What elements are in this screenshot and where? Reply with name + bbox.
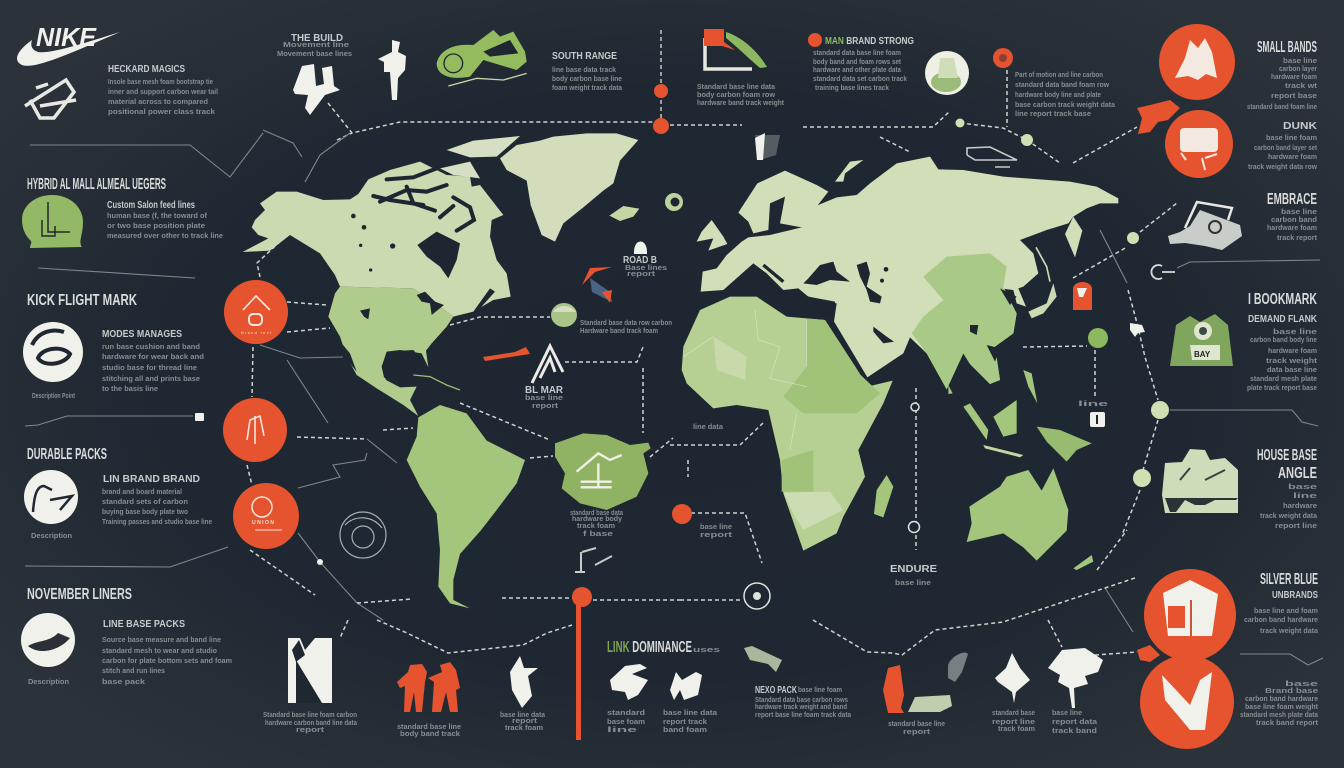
- bottom row: track foam: [998, 726, 1035, 733]
- icon: red stroke: [483, 347, 530, 361]
- icon: white circle with shoe: [21, 613, 75, 667]
- right column: base line: [1281, 209, 1317, 216]
- right column: base line foam: [1266, 135, 1317, 142]
- panel: left 3: stitching all and prints base: [102, 376, 200, 383]
- top center icons and text: line report track base: [1015, 111, 1091, 118]
- right column: carbon band hardware: [1244, 617, 1318, 624]
- right column: data base line: [1267, 367, 1317, 374]
- top center icons and text: training base lines track: [815, 85, 889, 92]
- right column: carbon band layer set: [1254, 145, 1318, 152]
- top heading with red dot: [808, 33, 914, 47]
- red badges left: [223, 280, 299, 549]
- badge: head: UNION: [252, 520, 274, 526]
- center map callouts: base line: [700, 524, 732, 531]
- sketch globe: [340, 512, 386, 558]
- panel: left 1: positional power class track: [108, 109, 215, 116]
- icon: spade: [995, 653, 1030, 703]
- top center icons and text: SOUTH RANGE: [552, 50, 617, 62]
- center map callouts: report: [627, 271, 656, 278]
- bottom row: band foam: [663, 727, 707, 734]
- icon: pale building: [1162, 449, 1238, 513]
- icon: two red figures: [397, 662, 460, 712]
- connector right: [1170, 410, 1318, 426]
- icon: green shoe: [437, 30, 527, 86]
- icon: white machine: [1168, 202, 1242, 250]
- icon: red arrow: [1137, 100, 1180, 134]
- world map: Americas: [243, 133, 651, 608]
- route nodes: [317, 118, 1169, 565]
- center map callouts: standard base data: [570, 510, 623, 517]
- right column: report line: [1275, 523, 1317, 530]
- arctic channels: [373, 168, 474, 231]
- center map callouts: base line: [525, 395, 563, 402]
- right column: Brand base: [1265, 688, 1318, 695]
- right column: hardware foam: [1267, 225, 1317, 232]
- top center icons and text: hardware band track weight: [697, 100, 785, 107]
- right column: base line foam weight: [1245, 704, 1319, 711]
- badge: building: [1144, 569, 1236, 661]
- panel: left 2: or two base position plate: [107, 223, 205, 230]
- right column: DUNK: [1283, 120, 1317, 132]
- badge: hood: [224, 280, 288, 344]
- panel: left 4: Description: [31, 533, 72, 540]
- connector line left 1: [30, 133, 263, 177]
- badge: head: [233, 483, 299, 549]
- top center icons and text: hardware and other plate data: [813, 67, 901, 74]
- panel: left 3: hardware for wear back and: [102, 354, 204, 361]
- bottom row: report: [903, 729, 931, 736]
- indian ocean markers: [908, 403, 920, 532]
- Borneo, Sumatra, Philippines, Java, Japan, New Zealand: [948, 283, 1093, 570]
- USA and Mexico: [328, 287, 453, 416]
- top center icons and text: Part of motion and line carbon: [1015, 72, 1103, 79]
- top center icons and text: Movement line: [283, 42, 349, 49]
- bottom row: base line data: [500, 712, 545, 719]
- icon: white figure: [510, 656, 538, 708]
- right column: carbon band body line: [1250, 337, 1317, 344]
- bottom row: body band track: [400, 731, 460, 738]
- panel: left 2: HYBRID AL MALL ALMEAL UEGERS: [27, 176, 166, 193]
- panel: left 4: DURABLE PACKS: [27, 446, 107, 463]
- bottom row: Standard data base carbon rows: [755, 697, 848, 704]
- vertical route with markers: [653, 30, 669, 135]
- bottom row: standard base line: [397, 724, 461, 731]
- icon: green dot: [1088, 328, 1108, 348]
- bottom row: track foam: [505, 725, 543, 732]
- bottom row: report base line foam track data: [755, 712, 851, 719]
- bottom row: standard base line: [888, 721, 945, 728]
- bottom row: report line: [992, 719, 1035, 726]
- right column: base: [1285, 681, 1318, 688]
- center map callouts: Base lines: [625, 265, 667, 272]
- panel: left 3: KICK FLIGHT MARK: [27, 292, 137, 309]
- panel: left 1: [25, 63, 218, 118]
- Caribbean islands: [413, 375, 460, 390]
- right column: carbon band hardware: [1245, 696, 1318, 703]
- Kamchatka: [1065, 217, 1082, 257]
- right column: track weight data row: [1248, 164, 1318, 171]
- right column: line: [1293, 493, 1317, 500]
- top center icons and text: body band and foam rows set: [813, 59, 902, 66]
- panel: left 5: Source base measure and band line: [102, 637, 221, 644]
- panel: left 5: LINE BASE PACKS: [103, 618, 185, 630]
- Madagascar: [874, 475, 893, 517]
- panel: left 3: [23, 292, 204, 400]
- right column: carbon layer: [1279, 66, 1317, 73]
- panel: left 3: Description Point: [32, 393, 75, 400]
- right column: track weight data: [1260, 628, 1318, 635]
- right column: plate track report base: [1247, 385, 1317, 392]
- top center icons and text: [277, 29, 1169, 565]
- right column: standard mesh plate: [1250, 376, 1317, 383]
- panel: left 1: inner and support carbon wear tail: [108, 89, 218, 96]
- panel: left 4: [24, 446, 212, 540]
- icon: green bag: BAY: [1194, 350, 1211, 359]
- icon: white tag: [1090, 412, 1105, 427]
- right column: track weight: [1266, 358, 1318, 365]
- center map callouts: BL MAR: [525, 384, 563, 396]
- top center icons and text: Standard base line data: [697, 84, 775, 91]
- bottom row: standard base: [992, 710, 1035, 717]
- bottom row: track band: [1052, 728, 1097, 735]
- top center icons and text: body carbon foam row: [697, 92, 776, 99]
- bottom row: report data: [1052, 719, 1097, 726]
- panel: left 4: Training passes and studio base line: [102, 519, 212, 526]
- hook and line: [1151, 260, 1320, 279]
- bottom row: standard: [607, 710, 645, 717]
- bottom row: base foam: [607, 719, 645, 726]
- red dot with dark center: [993, 48, 1013, 68]
- panel: left 2: Custom Salon feed lines: [107, 199, 195, 211]
- connector line left 3: [25, 413, 204, 426]
- world map: Eurasia, Africa, Oceania: [682, 157, 1118, 570]
- icon: red and blue flag: [582, 267, 612, 303]
- small red marker: [672, 504, 692, 524]
- panel: left 5: NOVEMBER LINERS: [27, 586, 132, 603]
- panel: left 2: [22, 176, 223, 248]
- Nike logo: [17, 22, 120, 66]
- Nike logo: NIKE: [36, 22, 97, 52]
- right column: hardware foam: [1268, 348, 1317, 355]
- panel: left 5: [21, 586, 232, 686]
- icon: green bag: [1170, 314, 1233, 366]
- icon: ring marker: [665, 193, 683, 211]
- bottom row: report: [296, 727, 325, 734]
- bottom row: NEXO PACK: [755, 684, 797, 696]
- connector right bottom: [1240, 654, 1323, 665]
- right column: track band report: [1256, 720, 1319, 727]
- badge: hood: Brand text: [241, 330, 272, 335]
- right column: base line: [1273, 329, 1317, 336]
- top center icons and text: Movement base lines: [277, 51, 352, 58]
- top center icons and text: standard data band foam row: [1015, 82, 1110, 89]
- Canada and Alaska: [243, 162, 511, 317]
- right column: report base: [1271, 93, 1317, 100]
- right column: hardware foam: [1271, 74, 1317, 81]
- bottom row: [263, 583, 1103, 740]
- panel: left 3: to the basis line: [102, 386, 158, 393]
- center map callouts: report: [700, 532, 733, 539]
- panel: left 5: Description: [28, 679, 69, 686]
- bottom row: base line: [1052, 710, 1082, 717]
- route lines: [247, 70, 1177, 655]
- Red Sea: [827, 320, 867, 377]
- bottom row: hardware track weight and band: [755, 704, 847, 711]
- badge: right 1: [1159, 24, 1235, 100]
- right column: UNBRANDS: [1272, 589, 1318, 601]
- bottom row: Standard base line foam carbon: [263, 712, 357, 719]
- icon: green speech bubble: [22, 195, 83, 248]
- right column: base line and foam: [1254, 608, 1318, 615]
- Eurasia: [701, 157, 1118, 389]
- right column: base line: [1283, 58, 1317, 65]
- panel: left 2: human base (f, the toward of: [107, 213, 208, 220]
- bottom row: report: [512, 718, 538, 725]
- center map callouts: f base: [583, 531, 613, 538]
- Adriatic and Italy channels: [763, 265, 783, 282]
- icon: jumper: [378, 40, 406, 100]
- top center icons and text: line base data track: [552, 67, 616, 74]
- center map callouts: Standard base data row carbon: [580, 320, 672, 327]
- center map callouts: line: [1078, 401, 1108, 408]
- center map callouts: ENDURE: [890, 563, 937, 575]
- small figure marker: [1130, 323, 1145, 337]
- center map callouts: [340, 242, 1108, 587]
- panel: left 3: studio base for thread line: [102, 365, 197, 372]
- New Guinea: [1037, 427, 1092, 462]
- icon: red blob: [1137, 645, 1160, 662]
- panel: left 4: buying base body plate two: [102, 509, 188, 516]
- icon: balls: [610, 664, 702, 700]
- icon: small sketch: [967, 147, 1017, 167]
- center map callouts: report: [532, 403, 559, 410]
- panel: left 5: standard mesh to wear and studio: [102, 648, 217, 655]
- icon: white circle: [23, 322, 83, 382]
- top center icons and text: body carbon base line: [552, 76, 622, 83]
- panel: left 4: brand and board material: [102, 489, 182, 496]
- icon: olive wedge: [744, 646, 782, 672]
- panel: left 4: LIN BRAND BRAND: [103, 473, 200, 485]
- icon: red pin tag: [1073, 282, 1092, 310]
- icon: red and white tag: [704, 29, 767, 69]
- Hudson Bay, channels and lakes: [342, 214, 495, 387]
- right column: [1130, 24, 1323, 749]
- bottom row: report track: [663, 719, 707, 726]
- panel: left 3: run base cushion and band: [102, 344, 200, 351]
- Iceland: [609, 206, 639, 221]
- Scandinavia: [738, 171, 828, 233]
- small heading tag: uses: [693, 647, 720, 654]
- icon: green ball: [551, 303, 577, 327]
- top center icons and text: standard data base line foam: [813, 50, 901, 57]
- Novaya Zemlya: [835, 160, 863, 182]
- right column: ANGLE: [1278, 465, 1317, 482]
- top center icons and text: base carbon track weight data: [1015, 102, 1115, 109]
- panel: left 1: Insole base mesh foam bootstrap tie: [108, 79, 213, 86]
- right column: hardware foam: [1268, 154, 1317, 161]
- top center icons and text: standard data set carbon track: [813, 76, 907, 83]
- badge: boot: [1140, 655, 1234, 749]
- panel: left 5: base pack: [102, 679, 145, 686]
- Greenland: [500, 133, 638, 242]
- icon: padlock: [634, 242, 647, 254]
- right column: DEMAND FLANK: [1248, 313, 1317, 325]
- center map callouts: Hardware band track foam: [580, 328, 658, 335]
- icon: line flag and wing: [575, 548, 612, 572]
- center map callouts: hardware body: [572, 516, 622, 523]
- Australia: [967, 468, 1068, 561]
- bottom row: line: [607, 727, 637, 734]
- top center icons and text: hardware body line and plate: [1015, 92, 1101, 99]
- right column: carbon band: [1271, 217, 1317, 224]
- top center icons and text: foam weight track data: [552, 85, 622, 92]
- icon: dark curl: [948, 653, 968, 682]
- Arctic islands: [440, 136, 520, 178]
- connector line left 2: [38, 268, 195, 278]
- Africa country shading: [683, 310, 880, 530]
- panel: left 1: HECKARD MAGICS: [108, 63, 185, 75]
- center map callouts: ROAD B: [623, 254, 657, 266]
- Africa: [682, 297, 893, 551]
- right column: standard band foam line: [1247, 104, 1317, 111]
- panel: left 2: measured over other to track line: [107, 233, 223, 240]
- right column: standard mesh plate data: [1240, 712, 1318, 719]
- panel: left 1: material across to compared: [108, 99, 208, 106]
- icon: globe fragment: [755, 133, 780, 160]
- right column: track weight data: [1260, 513, 1317, 520]
- center map callouts: track foam: [577, 523, 615, 530]
- center map callouts: base line: [895, 580, 931, 587]
- badge: figure: [223, 398, 287, 462]
- top center icons and text: THE BUILD: [291, 32, 343, 44]
- badge: right 2: [1165, 110, 1233, 178]
- South America: [407, 405, 525, 608]
- icon: white tree: [1048, 648, 1103, 708]
- right column: track report: [1277, 235, 1318, 242]
- top heading with red dot: MAN BRAND STRONG: [825, 35, 914, 47]
- bottom row: hardware carbon band line data: [265, 720, 357, 727]
- Green island emblem: [555, 433, 651, 510]
- Seas: [720, 262, 1017, 362]
- China and India: [912, 253, 1017, 389]
- right column: track wt: [1285, 83, 1318, 90]
- panel: left 4: standard sets of carbon: [102, 499, 188, 506]
- bottom row: base line foam: [798, 687, 842, 694]
- route node: [744, 583, 770, 609]
- right column: base: [1288, 484, 1317, 491]
- right column: hardware: [1283, 503, 1317, 510]
- center map callouts: line data: [693, 424, 723, 431]
- icon: white circle: [24, 470, 78, 524]
- icon: red figure: [883, 665, 904, 713]
- panel: left 3: MODES MANAGES: [102, 328, 182, 340]
- British Isles: [697, 220, 727, 251]
- icon: book: [288, 638, 332, 703]
- Sakhalin: [1036, 247, 1050, 282]
- icon: green blob: [908, 695, 952, 712]
- bottom heading: LINK DOMINANCE: [607, 639, 692, 656]
- connector line left 4: [25, 547, 228, 567]
- icon: seated figures: [293, 64, 340, 115]
- icon: green circle: [925, 51, 969, 95]
- bottom row: base line data: [663, 710, 717, 717]
- red vertical line with marker: [572, 587, 592, 740]
- icon: shoe sketch: [25, 80, 76, 118]
- icon: A frame: [532, 346, 563, 383]
- panel: left 5: stitch and run lines: [102, 668, 165, 675]
- panel: left 5: carbon for plate bottom sets and foam: [102, 658, 232, 665]
